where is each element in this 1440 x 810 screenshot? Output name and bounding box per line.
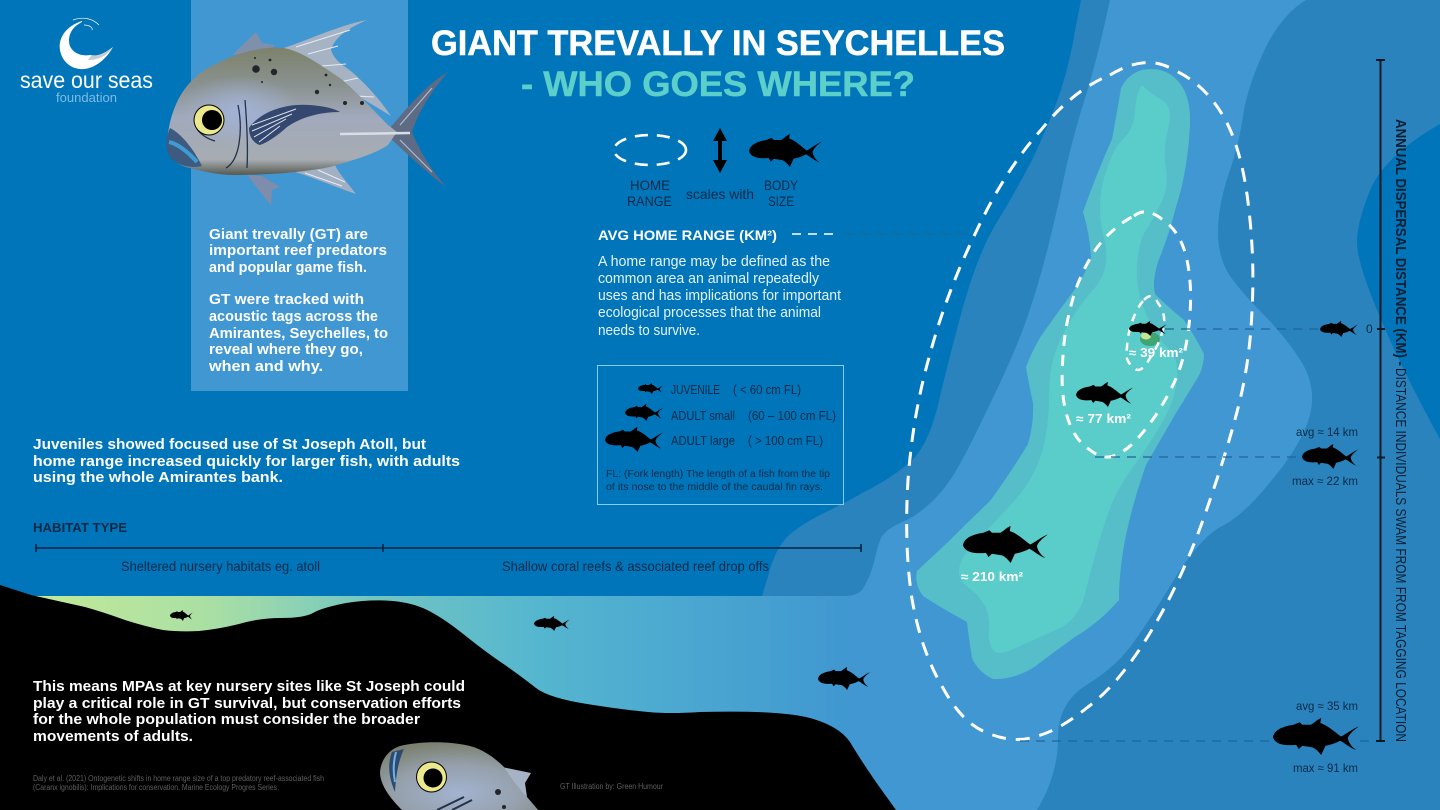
icon: wave crescent xyxy=(60,18,113,69)
logo: Save Our Seas Foundation xyxy=(20,18,153,105)
text block: home range definition: needs to survive. xyxy=(598,323,700,339)
text block: home range definition: A home range may be defined as the xyxy=(598,254,830,270)
home range: juvenile xyxy=(1126,296,1164,370)
ventral fin xyxy=(247,175,280,206)
legend row: adult small xyxy=(625,404,836,423)
axis value: small adult avg: avg ≈ 14 km xyxy=(1296,425,1358,439)
legend row: juvenile: JUVENILE xyxy=(671,383,720,397)
legend row: juvenile xyxy=(638,383,801,397)
legend row: adult large: ( > 100 cm FL) xyxy=(748,434,823,448)
text block: home range definition: ecological processes that the animal xyxy=(598,305,821,321)
axis title: bold part: ANNUAL DISPERSAL DISTANCE (KM) - xyxy=(1392,119,1409,366)
pectoral fin xyxy=(249,105,340,145)
citation: (Caranx ignobilis): Implications for conservation. Marine Ecology Progres Series. xyxy=(33,783,279,792)
text block: juveniles finding: using the whole Amirantes bank. xyxy=(33,469,283,486)
seabed fish: juvenile xyxy=(170,610,193,621)
text block: home range definition: uses and has implications for important xyxy=(598,288,841,304)
legend row: adult small: ADULT small xyxy=(671,409,735,423)
text block: conclusion: movements of adults. xyxy=(33,728,193,745)
seabed fish: adult small xyxy=(534,616,570,631)
leader lines: dispersal distance xyxy=(1020,329,1378,741)
axis fish: adult small xyxy=(1302,444,1358,469)
icon: fish xyxy=(749,134,822,167)
legend row: adult large: ADULT large xyxy=(671,434,735,448)
habitat label: coral reefs: Shallow coral reefs & associated reef drop offs xyxy=(502,558,769,574)
text block: intro: important reef predators xyxy=(209,243,387,259)
text block: conclusion: for the whole population must consider the broader xyxy=(33,711,420,728)
gill lines xyxy=(197,100,247,168)
fish body xyxy=(168,48,397,175)
title line 2: - WHO GOES WHERE? xyxy=(521,65,915,104)
text block: intro: and popular game fish. xyxy=(209,260,367,276)
axis fish: adult large xyxy=(1273,718,1359,755)
map fish: juvenile xyxy=(1129,321,1183,360)
habitat type scale xyxy=(33,520,861,574)
habitat label: nursery: Sheltered nursery habitats eg. atoll xyxy=(121,558,320,574)
text block: juveniles finding: Juveniles showed focused use of St Joseph Atoll, but xyxy=(33,436,426,453)
habitat bar xyxy=(36,544,861,552)
home range: small adult xyxy=(1062,212,1191,457)
lateral line xyxy=(340,133,410,134)
dispersal axis xyxy=(1273,60,1385,775)
text block: intro: acoustic tags across the xyxy=(209,309,378,325)
home range: large adult xyxy=(907,63,1253,740)
illustration: fish head at bottom xyxy=(380,742,538,810)
legend note: fork length: of its nose to the middle of the caudal fin rays. xyxy=(606,481,823,493)
axis value: small adult max: max ≈ 22 km xyxy=(1292,474,1358,488)
leader line: home range xyxy=(792,233,968,235)
heading: avg home range: AVG HOME RANGE (KM²) xyxy=(598,227,777,243)
soft dorsal fin xyxy=(284,20,391,116)
axis value: large adult max: max ≈ 91 km xyxy=(1293,761,1358,775)
logo wordmark: save our seas xyxy=(20,67,153,93)
legend note: fork length xyxy=(606,468,830,493)
title line 1: GIANT TREVALLY IN SEYCHELLES xyxy=(431,24,1005,63)
heading: habitat type: HABITAT TYPE xyxy=(33,520,127,535)
text block: juveniles finding xyxy=(33,436,460,486)
home range value: adult large: ≈ 210 km² xyxy=(961,570,1023,584)
text block: intro: reveal where they go, xyxy=(209,342,363,358)
text block: intro: GT were tracked with xyxy=(209,292,364,308)
text block: intro: Giant trevally (GT) are xyxy=(209,227,368,243)
seabed fish: adult large xyxy=(818,667,870,690)
axis value: 0: 0 xyxy=(1366,322,1373,336)
home range value: juvenile: ≈ 39 km² xyxy=(1129,346,1183,360)
illustration: giant trevally xyxy=(166,20,448,206)
legend: home range scales with body size xyxy=(614,128,822,209)
text block: intro xyxy=(208,227,388,375)
text block: conclusion xyxy=(33,678,465,745)
legend row: adult small: (60 – 100 cm FL) xyxy=(748,409,836,423)
text block: home range definition xyxy=(598,254,841,339)
axis title xyxy=(1392,119,1409,742)
text block: home range definition: common area an animal repeatedly xyxy=(598,271,820,287)
legend row: adult large xyxy=(605,427,823,452)
anal fin xyxy=(295,147,385,194)
spots xyxy=(252,57,364,105)
text block: conclusion: play a critical role in GT survival, but conservation efforts xyxy=(33,695,461,712)
logo sub-wordmark: foundation xyxy=(56,90,117,105)
mouth xyxy=(166,128,202,167)
label: scales with: scales with xyxy=(686,186,754,202)
panel: size class legend xyxy=(598,366,844,504)
citation xyxy=(33,774,324,792)
title xyxy=(431,24,1005,104)
arrow: scales xyxy=(713,128,727,173)
icon: dashed home range xyxy=(614,135,686,165)
text block: juveniles finding: home range increased quickly for larger fish, with adults xyxy=(33,453,460,470)
citation: Daly et al. (2021) Ontogenetic shifts in home range size of a top predatory reef-associated fish xyxy=(33,774,324,783)
seabed gradient xyxy=(0,596,862,810)
eye xyxy=(194,104,224,136)
illustration credit: GT Illustration by: Green Humour xyxy=(560,782,663,791)
text block: intro: Amirantes, Seychelles, to xyxy=(209,326,388,342)
map fish: adult small xyxy=(1076,382,1133,426)
label: home range: HOME xyxy=(630,178,670,193)
map: bathymetry layers xyxy=(762,0,1440,810)
legend: home range scales with body size: SIZE xyxy=(768,194,794,209)
text block: intro: when and why. xyxy=(208,359,323,375)
info panel behind fish xyxy=(191,0,408,391)
label: body size: BODY xyxy=(764,178,798,193)
legend: home range scales with body size: RANGE xyxy=(627,194,672,209)
tail xyxy=(390,72,448,187)
legend note: fork length: FL: (Fork length) The length of a fish from the tip xyxy=(606,468,830,480)
map fish: adult large xyxy=(961,526,1048,584)
axis fish: juvenile xyxy=(1320,321,1358,337)
home range value: adult small: ≈ 77 km² xyxy=(1076,412,1131,426)
front dorsal fin xyxy=(232,32,275,55)
text block: conclusion: This means MPAs at key nursery sites like St Joseph could xyxy=(33,678,465,695)
axis value: large adult avg: avg ≈ 35 km xyxy=(1296,699,1358,713)
black seabed silhouette xyxy=(0,585,896,810)
legend row: juvenile: ( < 60 cm FL) xyxy=(733,383,801,397)
